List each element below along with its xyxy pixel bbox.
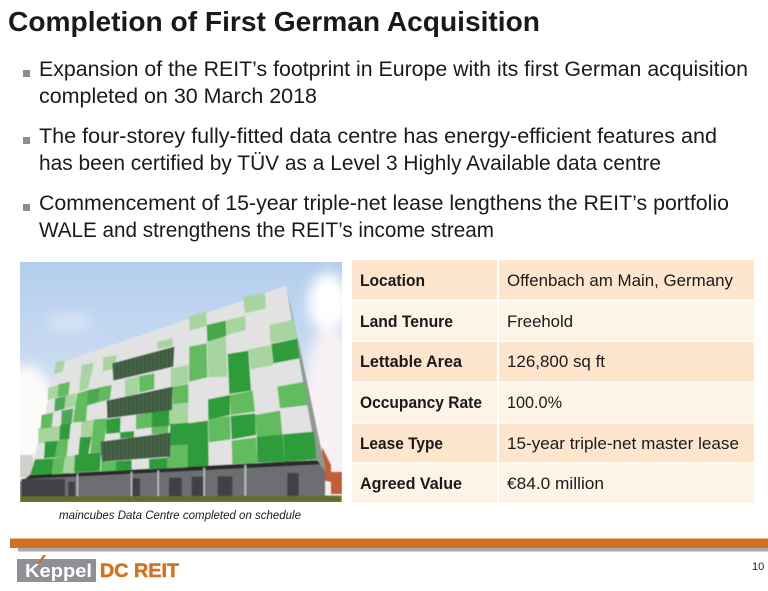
table: property details bbox=[352, 260, 754, 503]
row: land tenure: Land Tenure bbox=[360, 313, 453, 331]
row: location: Location bbox=[360, 272, 425, 290]
bullet 3: WALE and strengthens the REIT’s income stream bbox=[39, 219, 494, 242]
title: Completion of First German Acquisition bbox=[8, 6, 540, 37]
bullet 3: Commencement of 15-year triple-net lease lengthens the REIT’s portfolio bbox=[39, 192, 729, 215]
row: agreed value bbox=[352, 464, 754, 503]
facade bbox=[30, 286, 317, 475]
bullet 2 bbox=[23, 125, 717, 175]
logo: Keppel DC REIT: DC REIT bbox=[100, 560, 179, 582]
row: land tenure: Freehold bbox=[507, 313, 573, 331]
caption: maincubes Data Centre completed on schedule bbox=[59, 510, 301, 522]
row: lease type: Lease Type bbox=[360, 435, 443, 453]
bullet 1 bbox=[23, 58, 748, 108]
bullet 1: Expansion of the REIT’s footprint in Europe with its first German acquisition bbox=[39, 58, 748, 81]
left half panels bbox=[30, 338, 188, 475]
row: lettable area: 126,800 sq ft bbox=[507, 353, 605, 371]
row: location: Offenbach am Main, Germany bbox=[507, 272, 734, 290]
bullet 2: The four-storey fully-fitted data centre has energy-efficient features and bbox=[39, 125, 717, 148]
row: agreed value: Agreed Value bbox=[360, 475, 462, 493]
side of building bbox=[286, 286, 326, 472]
logo: Keppel DC REIT: Keppel bbox=[25, 561, 92, 581]
bullet 1: completed on 30 March 2018 bbox=[39, 85, 317, 108]
row: location bbox=[352, 260, 754, 300]
row: lettable area: Lettable Area bbox=[360, 353, 463, 371]
row: lease type bbox=[352, 424, 754, 462]
row: lettable area bbox=[352, 342, 754, 382]
row: occupancy rate: Occupancy Rate bbox=[360, 394, 482, 412]
right half panels bbox=[173, 293, 317, 467]
page number: 10 bbox=[752, 561, 764, 573]
row: occupancy rate bbox=[352, 382, 754, 422]
row: agreed value: €84.0 million bbox=[507, 475, 604, 493]
footer bar bbox=[10, 538, 768, 552]
logo: Keppel DC REIT bbox=[17, 555, 179, 582]
row: land tenure bbox=[352, 301, 754, 340]
bullet 2: has been certified by TÜV as a Level 3 Highly Available data centre bbox=[39, 152, 661, 175]
photo: maincubes data centre bbox=[0, 262, 356, 502]
row: occupancy rate: 100.0% bbox=[507, 394, 562, 412]
ground floor bbox=[20, 463, 326, 497]
bullet 3 bbox=[23, 192, 729, 242]
row: lease type: 15-year triple-net master lease bbox=[507, 435, 739, 453]
bullet list bbox=[23, 58, 748, 242]
louvre windows bbox=[101, 347, 174, 462]
